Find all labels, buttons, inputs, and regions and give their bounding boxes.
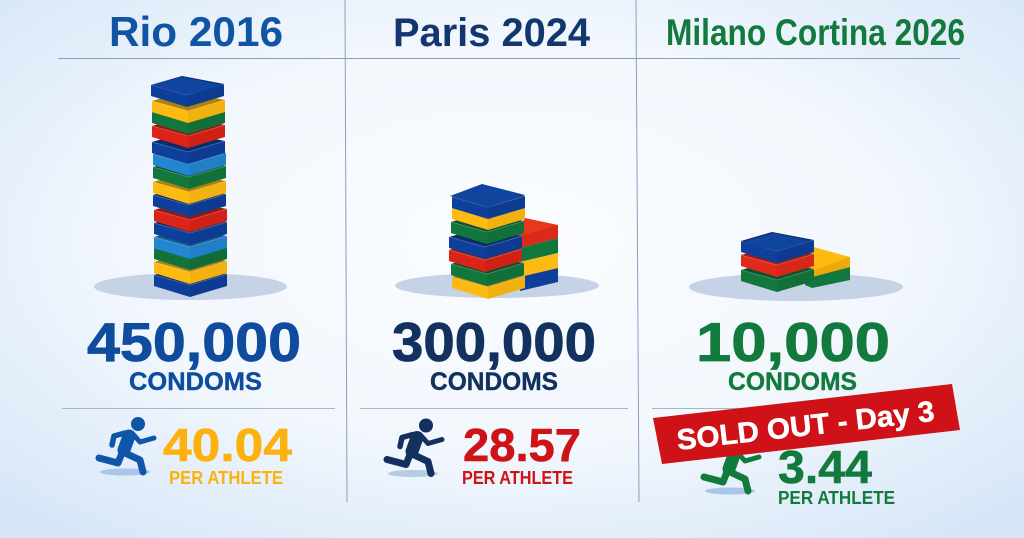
- label: per athlete: PER ATHLETE: [462, 467, 573, 488]
- value: 3.44: 3.44: [778, 441, 872, 493]
- total: 300,000: 300,000: [392, 311, 596, 373]
- condom stack: Milano: [741, 232, 850, 292]
- value: 28.57: 28.57: [463, 419, 581, 471]
- heading: Paris 2024: Paris 2024: [393, 11, 591, 55]
- value: 40.04: 40.04: [163, 419, 292, 471]
- label: condoms: CONDOMS: [430, 368, 558, 396]
- condom stack: Rio: [151, 76, 227, 297]
- shadow under Paris stack: [395, 273, 599, 298]
- total: 10,000: 10,000: [696, 311, 890, 373]
- panel: Milano Cortina 2026: [666, 12, 965, 508]
- icon: runner: [99, 417, 154, 476]
- total: 450,000: 450,000: [87, 311, 301, 373]
- shadow under Milano stack: [689, 273, 903, 301]
- panel: Rio 2016: [87, 8, 301, 488]
- heading: Rio 2016: Rio 2016: [109, 8, 283, 55]
- condom stack: Paris: [449, 184, 558, 299]
- callout: sold out banner: SOLD OUT - Day 3: [675, 396, 936, 457]
- callout: sold out banner: [653, 384, 960, 464]
- label: per athlete: PER ATHLETE: [778, 487, 895, 508]
- label: condoms: CONDOMS: [129, 368, 262, 396]
- label: condoms: CONDOMS: [728, 368, 857, 396]
- heading: Milano Cortina 2026: Milano Cortina 2026: [666, 12, 965, 53]
- label: per athlete: PER ATHLETE: [169, 467, 283, 488]
- shadow under Rio stack: [94, 273, 287, 300]
- icon: runner: [387, 418, 442, 477]
- panel: Paris 2024: [387, 11, 599, 488]
- icon: runner: [704, 452, 759, 494]
